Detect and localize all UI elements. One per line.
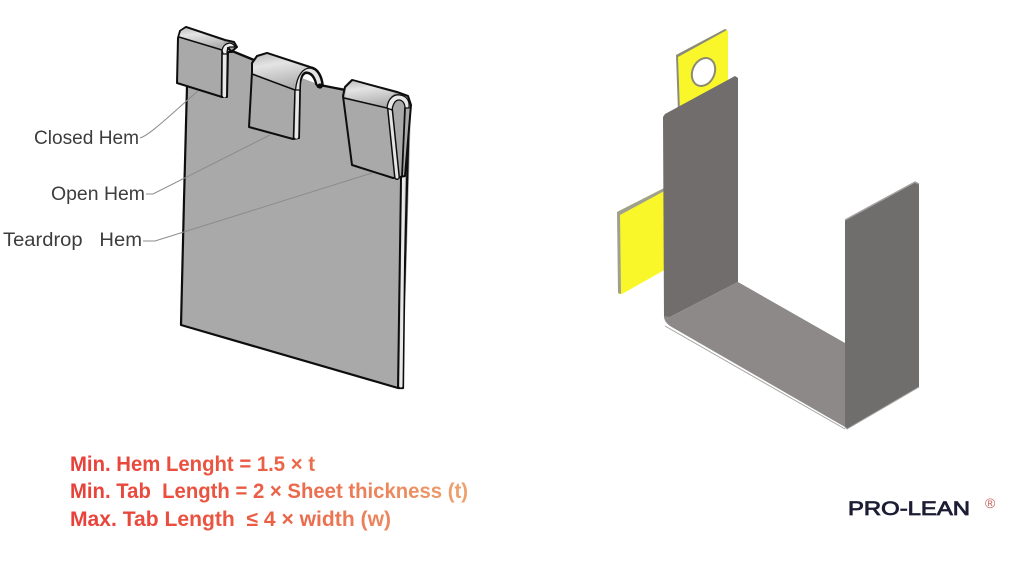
logo registered mark: ® xyxy=(985,495,996,511)
closed hem tab xyxy=(177,27,237,97)
label: closed hem: Closed Hem xyxy=(34,127,139,149)
top yellow tab with hole xyxy=(676,29,728,112)
hem labels xyxy=(3,127,145,251)
diagram: sheet metal with three hem types xyxy=(177,27,411,388)
teardrop hem tab xyxy=(343,80,411,178)
left vertical wall xyxy=(663,76,738,318)
left yellow tab xyxy=(617,186,668,294)
right vertical wall xyxy=(845,182,919,429)
rule: maximum tab length: Max. Tab Length ≤ 4 × width (w) xyxy=(70,508,391,531)
rule: minimum tab length: Min. Tab Length = 2 × Sheet thickness (t) xyxy=(70,480,468,503)
diagram: U-shaped bracket with yellow tabs xyxy=(617,29,919,429)
sheet panel xyxy=(181,50,411,388)
rule: minimum hem length: Min. Hem Lenght = 1.5 × t xyxy=(70,453,315,476)
design rules text xyxy=(70,453,468,531)
label: teardrop hem: Teardrop Hem xyxy=(3,229,142,251)
label: open hem: Open Hem xyxy=(51,183,145,205)
open hem tab xyxy=(249,53,323,139)
logo: PRO-LEAN xyxy=(848,495,996,520)
logo: PRO-LEAN: PRO-LEAN xyxy=(848,498,970,520)
bottom wall xyxy=(664,282,845,427)
leader lines xyxy=(140,91,372,241)
